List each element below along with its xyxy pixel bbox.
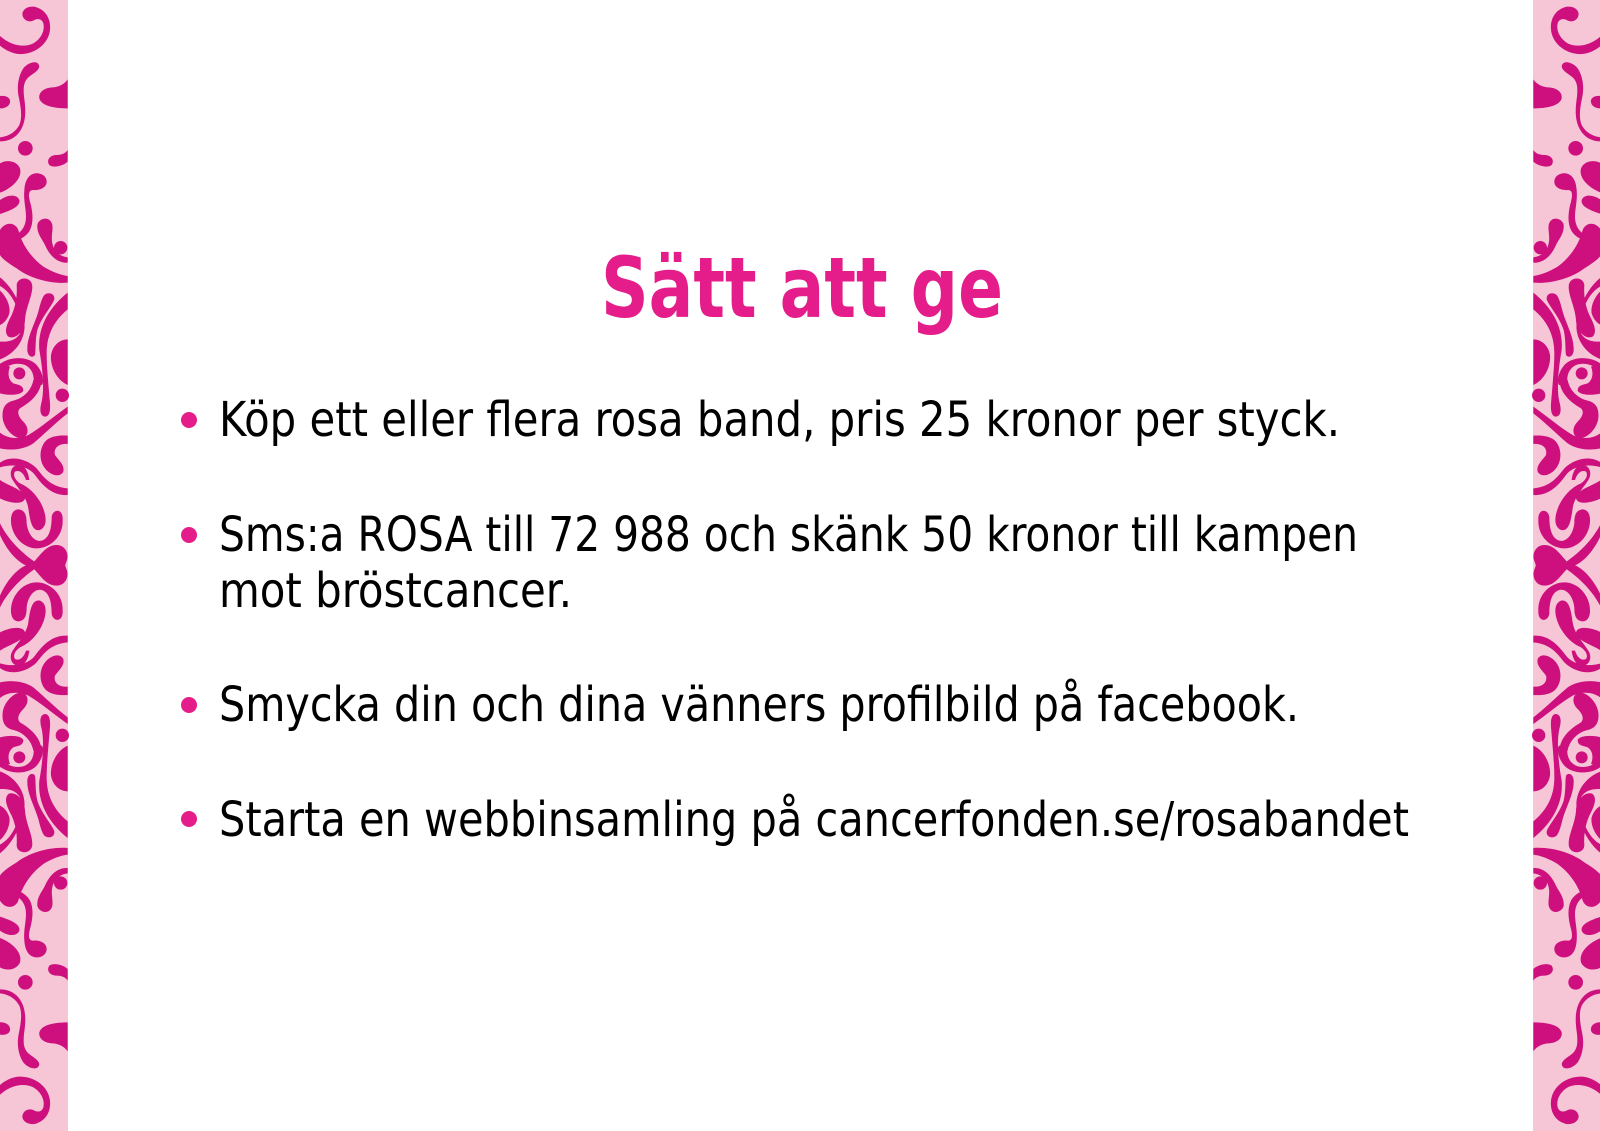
bullet item: sms donation: mot bröstcancer. bbox=[219, 563, 572, 619]
bullet item: buy ribbons: Köp ett eller flera rosa band, pris 25 kronor per styck. bbox=[219, 392, 1340, 448]
panel: right ornamental border bbox=[1532, 0, 1600, 1131]
bullet item: sms donation: Sms:a ROSA till 72 988 och skänk 50 kronor till kampen bbox=[219, 507, 1358, 563]
title: Sätt att ge bbox=[601, 239, 1003, 337]
bullet item: sms donation bbox=[181, 507, 1358, 619]
bullet item: facebook profile picture: Smycka din och dina vänners profilbild på facebook. bbox=[219, 677, 1299, 733]
bullet item: web fundraiser: Starta en webbinsamling på cancerfonden.se/rosabandet bbox=[219, 792, 1409, 848]
panel: left ornamental border bbox=[0, 0, 69, 1131]
